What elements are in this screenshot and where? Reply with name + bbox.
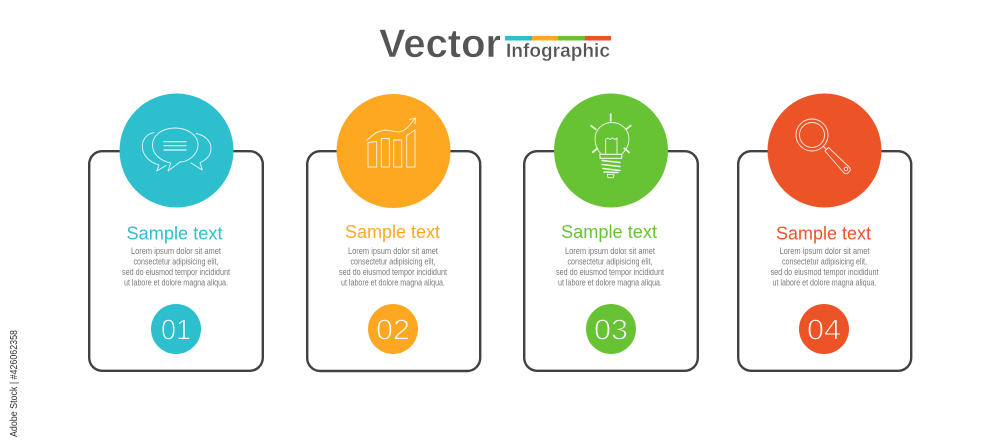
- body text 4: Lorem ipsum dolor sit amet: [780, 246, 870, 256]
- icon: speech bubbles: [142, 128, 211, 171]
- body text 1: [122, 246, 230, 288]
- panel 2: growth: [307, 94, 480, 371]
- number badge 04: [799, 304, 849, 354]
- body text 4: [770, 246, 879, 288]
- heading 4: Sample text: [776, 222, 871, 244]
- heading 3: Sample text: [561, 221, 657, 242]
- number badge 03: [586, 304, 636, 354]
- icon circle 2: [336, 94, 450, 208]
- title: Vector Infographic: [379, 22, 611, 66]
- body text 3: sed do eiusmod tempor incididunt: [556, 267, 664, 277]
- heading 2: Sample text: [345, 221, 440, 242]
- body text 1: consectetur adipisicing elit,: [134, 256, 218, 266]
- title word: Infographic: Infographic: [506, 41, 610, 62]
- body text 3: Lorem ipsum dolor sit amet: [565, 246, 655, 256]
- number badge 01: [151, 304, 201, 354]
- title word: Vector: Vector: [379, 22, 501, 66]
- panel 3: idea: [524, 94, 698, 371]
- body text 2: ut labore et dolore magna aliqua.: [341, 278, 445, 288]
- icon circle 4: [768, 94, 882, 208]
- card outline 1: [89, 151, 263, 371]
- body text 1: sed do eiusmod tempor incididunt: [122, 267, 230, 277]
- body text 1: ut labore et dolore magna aliqua.: [124, 278, 228, 288]
- body text 4: consectetur adipisicing elit,: [782, 256, 867, 266]
- card outline 3: [524, 151, 698, 371]
- heading 1: Sample text: [126, 222, 222, 244]
- stock id caption: Adobe Stock | #426062358: [8, 330, 20, 437]
- body text 3: consectetur adipisicing elit,: [568, 256, 652, 266]
- icon circle 1: [120, 94, 234, 208]
- number badge 01: 01: [161, 314, 191, 346]
- body text 2: Lorem ipsum dolor sit amet: [348, 246, 438, 256]
- panel 1: speech: [89, 94, 263, 371]
- body text 1: Lorem ipsum dolor sit amet: [131, 246, 221, 256]
- icon: light bulb: [591, 114, 631, 178]
- body text 2: sed do eiusmod tempor incididunt: [339, 267, 447, 277]
- body text 4: ut labore et dolore magna aliqua.: [772, 278, 876, 288]
- number badge 04: 04: [807, 314, 841, 346]
- body text 4: sed do eiusmod tempor incididunt: [770, 267, 879, 277]
- panel 4: search: [738, 94, 911, 371]
- body text 2: [339, 246, 447, 288]
- number badge 02: 02: [376, 314, 410, 346]
- number badge 03: 03: [594, 314, 628, 346]
- four-colour title bar: [505, 36, 611, 40]
- number badge 02: [368, 304, 418, 354]
- body text 2: consectetur adipisicing elit,: [350, 256, 436, 266]
- card outline 2: [307, 151, 480, 371]
- card outline 4: [738, 151, 911, 371]
- body text 3: [556, 246, 664, 288]
- icon circle 3: [554, 94, 668, 208]
- body text 3: ut labore et dolore magna aliqua.: [558, 278, 662, 288]
- icon: magnifying glass: [796, 119, 850, 174]
- icon: rising bar chart: [367, 118, 416, 167]
